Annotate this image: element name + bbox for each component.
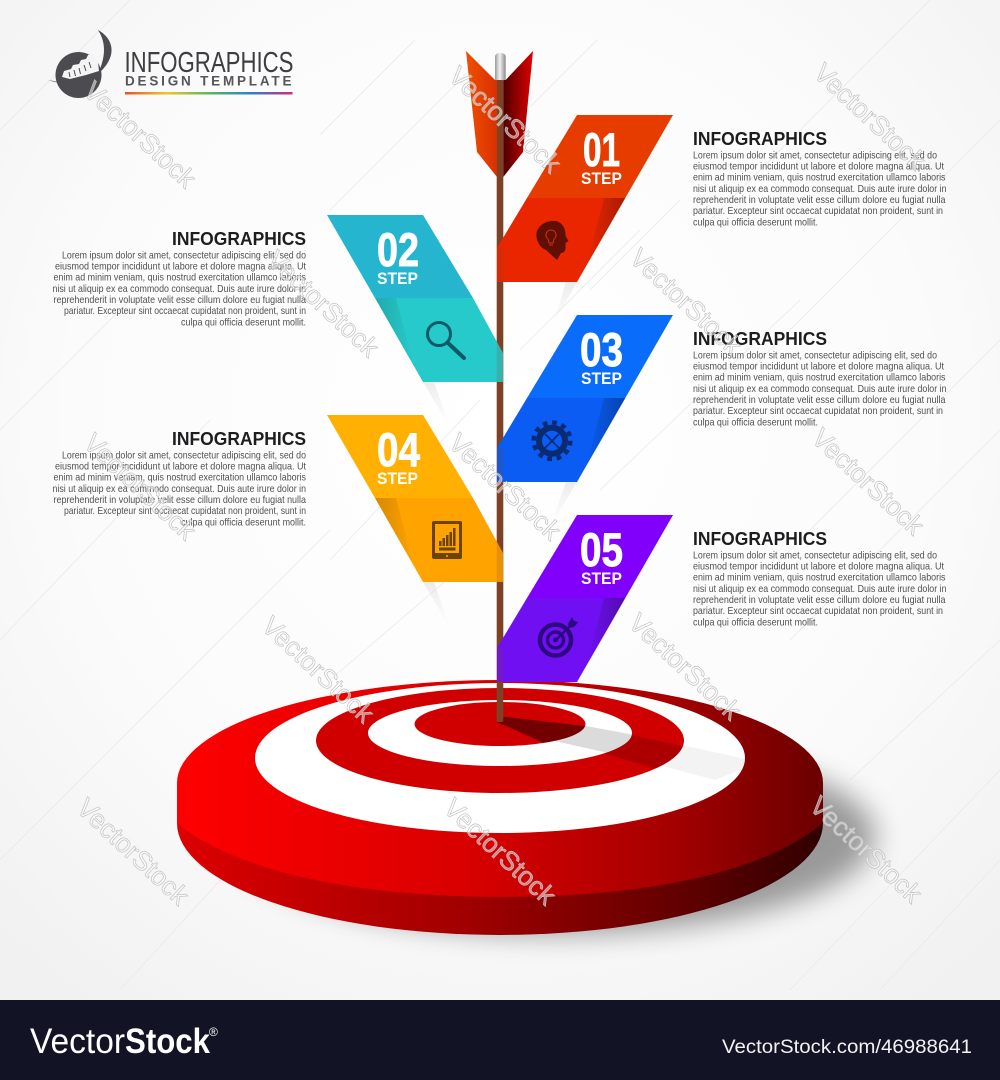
flag 03 lower: [497, 398, 625, 482]
body 04: culpa qui officia deserunt mollit.: [181, 517, 306, 528]
watermarks: VectorStock: [804, 790, 928, 909]
body 03: Lorem ipsum dolor sit amet, consectetur adipiscing elit, sed do: [693, 350, 937, 361]
arrow shaft: [497, 80, 503, 722]
flag 05: [497, 515, 673, 682]
watermarks: VectorStock: [78, 75, 202, 194]
body 01: culpa qui officia deserunt mollit.: [693, 217, 818, 228]
footer registered mark: ®: [209, 1025, 218, 1039]
body 03: enim ad minim veniam, quis nostrud exercitation ullamco laboris: [693, 373, 946, 384]
flag 04 number: 04: [377, 423, 420, 476]
body 03: eiusmod tempor incididunt ut labore et dolore magna aliqua. Ut: [693, 361, 944, 372]
watermarks: VectorStock: [443, 60, 567, 179]
body 01: reprehenderit in voluptate velit esse cillum dolore eu fugiat nulla: [693, 195, 946, 206]
body 04: Lorem ipsum dolor sit amet, consectetur adipiscing elit, sed do: [62, 450, 306, 461]
body 01: nisi ut aliquip ex ea commodo consequat. Duis aute irure dolor in: [693, 184, 947, 195]
text block 01: [693, 129, 947, 228]
target lower side: [177, 783, 823, 935]
flag 02: [327, 215, 503, 382]
flag 02 number: 02: [377, 223, 419, 276]
arrow nock: [495, 53, 506, 80]
body 01: pariatur. Excepteur sint occaecat cupidatat non proident, sunt in: [693, 206, 943, 217]
icon: head with light bulb: [536, 221, 568, 260]
flag 01 lower: [497, 198, 625, 282]
watermarks: VectorStock: [623, 607, 747, 726]
logo rainbow rule: [125, 92, 292, 94]
body 02: reprehenderit in voluptate velit esse cillum dolore eu fugiat nulla: [54, 295, 306, 306]
body 02: eiusmod tempor incididunt ut labore et dolore magna aliqua. Ut: [55, 261, 306, 272]
flag 04 lower: [375, 498, 503, 582]
arrow right feather: [503, 51, 533, 177]
flag 04 label: STEP: [377, 469, 418, 488]
body 05: reprehenderit in voluptate velit esse cillum dolore eu fugiat nulla: [693, 595, 946, 606]
body 04: enim ad minim veniam, quis nostrud exercitation ullamco laboris: [54, 473, 306, 484]
flag 03 number: 03: [580, 323, 623, 376]
logo subtitle: DESIGN TEMPLATE: [125, 74, 294, 88]
outer white ring: [255, 683, 745, 833]
flag 01: [497, 115, 673, 282]
watermarks: VectorStock: [71, 792, 195, 911]
body 04: nisi ut aliquip ex ea commodo consequat. Duis aute irure dolor in: [52, 484, 306, 495]
flag 05 label: STEP: [581, 569, 622, 588]
watermarks: VectorStock: [806, 422, 930, 541]
arrow: [466, 51, 533, 722]
logo: [48, 30, 294, 98]
flag 05 number: 05: [580, 523, 623, 576]
flag 02 label: STEP: [377, 269, 418, 288]
body 03: pariatur. Excepteur sint occaecat cupidatat non proident, sunt in: [693, 406, 943, 417]
arrow left feather: [466, 51, 497, 177]
watermarks: VectorStock: [256, 610, 380, 729]
watermarks: VectorStock: [443, 427, 567, 546]
body 01: eiusmod tempor incididunt ut labore et dolore magna aliqua. Ut: [693, 161, 944, 172]
body 05: nisi ut aliquip ex ea commodo consequat. Duis aute irure dolor in: [693, 584, 947, 595]
flag 04 upper: [327, 415, 473, 498]
footer brand: VectorStock: [30, 1022, 210, 1061]
logo icon: [48, 30, 112, 98]
body 01: Lorem ipsum dolor sit amet, consectetur adipiscing elit, sed do: [693, 150, 937, 161]
inner white ring: [368, 700, 632, 766]
watermarks: VectorStock: [624, 242, 748, 361]
flag drop shadows: [423, 282, 577, 628]
body 04: pariatur. Excepteur sint occaecat cupidatat non proident, sunt in: [64, 506, 306, 517]
body 04: reprehenderit in voluptate velit esse cillum dolore eu fugiat nulla: [54, 495, 306, 506]
watermarks: VectorStock: [261, 244, 385, 363]
body 05: [693, 550, 947, 628]
flag 02 upper: [327, 215, 473, 298]
heading 04: INFOGRAPHICS: [172, 429, 306, 449]
body 02: Lorem ipsum dolor sit amet, consectetur adipiscing elit, sed do: [62, 250, 306, 261]
flag 03: [497, 315, 673, 482]
heading 01: INFOGRAPHICS: [693, 129, 827, 149]
body 01: [693, 150, 947, 228]
body 04: eiusmod tempor incididunt ut labore et dolore magna aliqua. Ut: [55, 461, 306, 472]
text block 05: [693, 529, 947, 628]
heading 02: INFOGRAPHICS: [172, 229, 306, 249]
target: [177, 680, 823, 935]
flag 01 label: STEP: [581, 169, 622, 188]
logo title: INFOGRAPHICS: [124, 47, 294, 79]
bullseye: [414, 702, 586, 746]
icon: magnifier: [428, 322, 464, 358]
body 05: culpa qui officia deserunt mollit.: [693, 617, 818, 628]
flag 01 upper: [527, 115, 673, 198]
icon: tablet with chart: [432, 521, 462, 559]
flag 05 upper: [527, 515, 673, 598]
body 02: nisi ut aliquip ex ea commodo consequat. Duis aute irure dolor in: [52, 284, 306, 295]
text block 03: [693, 329, 947, 428]
icon: target with arrow: [540, 617, 578, 656]
body 02: enim ad minim veniam, quis nostrud exercitation ullamco laboris: [54, 273, 306, 284]
watermarks: [71, 57, 932, 911]
body 05: Lorem ipsum dolor sit amet, consectetur adipiscing elit, sed do: [693, 550, 937, 561]
flag 03 upper: [527, 315, 673, 398]
body 03: reprehenderit in voluptate velit esse cillum dolore eu fugiat nulla: [693, 395, 946, 406]
heading 03: INFOGRAPHICS: [693, 329, 827, 349]
body 05: eiusmod tempor incididunt ut labore et dolore magna aliqua. Ut: [693, 561, 944, 572]
flag 02 lower: [375, 298, 503, 382]
flag 04: [327, 415, 503, 582]
floor shadow of target: [235, 738, 875, 934]
target upper body: [177, 680, 823, 897]
body 02: pariatur. Excepteur sint occaecat cupidatat non proident, sunt in: [64, 306, 306, 317]
body 03: [693, 350, 947, 428]
watermarks: VectorStock: [808, 57, 932, 176]
heading 05: INFOGRAPHICS: [693, 529, 827, 549]
flag 05 lower: [497, 598, 625, 682]
body 05: enim ad minim veniam, quis nostrud exercitation ullamco laboris: [693, 573, 946, 584]
footer url: VectorStock.com/46988641: [722, 1037, 972, 1058]
body 01: enim ad minim veniam, quis nostrud exercitation ullamco laboris: [693, 173, 946, 184]
body 02: [52, 250, 306, 328]
footer bar: [0, 1000, 1000, 1080]
body 03: nisi ut aliquip ex ea commodo consequat. Duis aute irure dolor in: [693, 384, 947, 395]
body 04: [52, 450, 306, 528]
body 03: culpa qui officia deserunt mollit.: [693, 417, 818, 428]
body 02: culpa qui officia deserunt mollit.: [181, 317, 306, 328]
flag 01 number: 01: [583, 123, 620, 176]
text block 04: [52, 429, 306, 528]
text block 02: [52, 229, 306, 328]
icon: gear: [534, 422, 570, 459]
watermarks: VectorStock: [78, 427, 202, 546]
flag 03 label: STEP: [581, 369, 622, 388]
body 05: pariatur. Excepteur sint occaecat cupidatat non proident, sunt in: [693, 606, 943, 617]
watermarks: VectorStock: [438, 792, 562, 911]
red ring: [316, 688, 684, 793]
